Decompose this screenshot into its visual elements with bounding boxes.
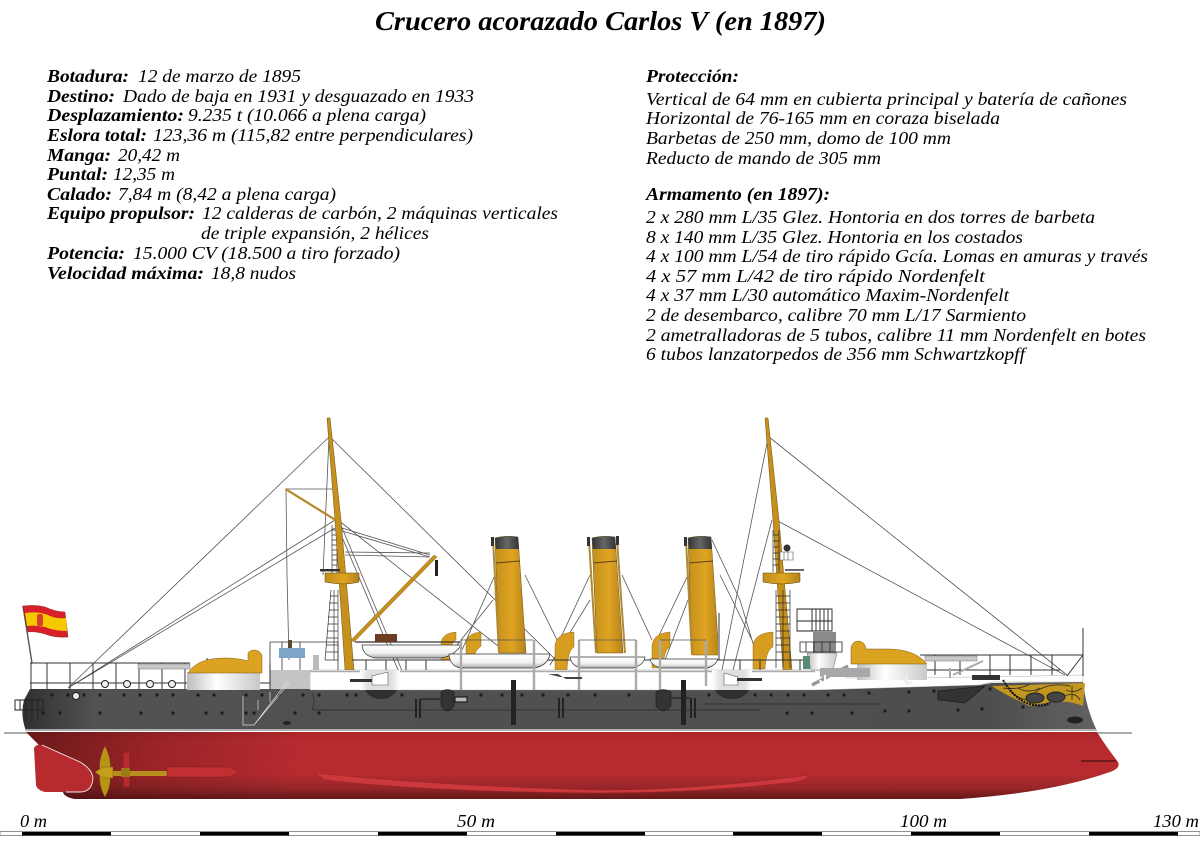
aft barbette	[138, 650, 262, 690]
text block: general specifications	[46, 66, 558, 283]
blades	[100, 746, 110, 797]
text block: general specifications: Desplazamiento:	[46, 105, 184, 125]
stern scuttle	[283, 721, 291, 725]
text block: general specifications: 18,8 nudos	[211, 263, 296, 283]
text block: general specifications: 12,35 m	[113, 164, 175, 184]
aft bridge	[270, 640, 338, 670]
accommodation ladder	[243, 682, 290, 725]
searchlight	[784, 544, 790, 552]
sponson cylinder 1	[441, 690, 454, 711]
aft gun barrel	[138, 664, 190, 669]
mast forward	[763, 418, 804, 670]
flag yellow stripe	[25, 612, 67, 631]
net booms	[420, 697, 690, 702]
scale label 130: 130 m	[1153, 811, 1199, 831]
crane hook	[435, 560, 438, 576]
boat 1	[355, 634, 462, 658]
searchlight platform	[780, 552, 793, 560]
text block: general specifications: de triple expansión, 2 hélices	[201, 223, 429, 243]
flag red stripes	[23, 605, 68, 637]
bilge keel	[315, 773, 808, 793]
text block: general specifications: 7,84 m (8,42 a plena carga)	[118, 184, 336, 205]
davits	[461, 640, 706, 690]
forward lattice	[773, 530, 790, 668]
armour line	[312, 693, 880, 710]
text block: protection	[645, 66, 1127, 168]
shaft	[113, 771, 168, 776]
casemate guns	[350, 670, 762, 699]
text block: general specifications: 20,42 m	[118, 145, 180, 165]
text block: general specifications: Velocidad máxima:	[47, 263, 204, 283]
text block: general specifications: Botadura:	[46, 66, 129, 86]
text block: armament: 4 x 100 mm L/54 de tiro rápido Gcía. Lomas en amuras y través	[646, 246, 1148, 266]
bow casemate shield	[938, 686, 985, 703]
crane	[351, 555, 437, 642]
small gun	[548, 674, 582, 679]
text block: general specifications: 9.235 t (10.066 a plena carga)	[188, 105, 426, 126]
aft fighting top	[325, 573, 359, 584]
text block: protection: Horizontal de 76-165 mm en coraza biselada	[645, 108, 1000, 128]
hawse pipe	[1067, 716, 1083, 724]
text block: protection: Vertical de 64 mm en cubierta principal y batería de cañones	[646, 89, 1127, 109]
bow keel mark	[1081, 760, 1116, 762]
ship side profile	[4, 418, 1132, 799]
rigging	[68, 437, 1067, 688]
text block: armament: 4 x 37 mm L/30 automático Maxim-Nordenfelt	[646, 285, 1010, 305]
rudder	[34, 745, 93, 792]
casemate aft	[350, 670, 400, 699]
title: Crucero acorazado Carlos V (en 1897)	[375, 6, 826, 36]
text block: general specifications: Manga:	[46, 145, 111, 165]
forward dome	[851, 641, 927, 664]
forward davit crane	[950, 661, 983, 678]
capstan and windlass	[972, 675, 1000, 680]
superstructure white	[270, 670, 1083, 690]
forward top gun	[785, 569, 804, 571]
text block: general specifications: Dado de baja en 1931 y desguazado en 1933	[122, 86, 474, 106]
text block: general specifications: 123,36 m (115,82 entre perpendiculares)	[153, 125, 473, 146]
text block: general specifications: 12 calderas de carbón, 2 máquinas verticales	[202, 203, 558, 223]
text block: armament	[645, 184, 1148, 364]
forward barbette	[851, 641, 977, 680]
hull fittings	[15, 680, 1083, 725]
mast aft	[285, 418, 438, 670]
text block: protection: Protección:	[645, 66, 739, 86]
hull grey topsides	[22, 682, 1097, 731]
text block: general specifications: 15.000 CV (18.500 a tiro forzado)	[133, 243, 400, 264]
text block: general specifications: Eslora total:	[46, 125, 147, 145]
boat 2	[449, 654, 550, 668]
text block: armament: 2 de desembarco, calibre 70 mm L/17 Sarmiento	[646, 305, 1026, 325]
ventilator cowls	[441, 632, 773, 670]
text block: armament: 2 x 280 mm L/35 Glez. Hontoria en dos torres de barbeta	[646, 207, 1095, 227]
white anchor forward	[903, 674, 912, 685]
forward fighting top	[763, 573, 800, 584]
aft deck life rings	[72, 680, 176, 700]
flag shield	[37, 614, 43, 626]
text block: protection: Reducto de mando de 305 mm	[645, 148, 881, 168]
bow ornament	[992, 680, 1085, 706]
hull red underbody	[26, 732, 1119, 799]
stern tube	[167, 767, 238, 777]
portholes	[41, 687, 1025, 715]
aft mast pole	[327, 418, 354, 670]
anchors	[1026, 693, 1044, 703]
scale bar	[0, 811, 1200, 836]
rails	[30, 628, 1083, 689]
text block: armament: 2 ametralladoras de 5 tubos, calibre 11 mm Nordenfelt en botes	[646, 325, 1146, 345]
forward bridge	[797, 609, 870, 685]
forward deck fittings	[820, 661, 1000, 688]
aft lattice	[325, 525, 338, 660]
text block: general specifications: Destino:	[46, 86, 115, 106]
stern gallery	[15, 700, 43, 722]
scale label 100: 100 m	[900, 811, 947, 831]
boat 3	[570, 657, 645, 668]
forward mast pole	[765, 418, 792, 670]
boat 4	[650, 659, 718, 668]
scale label 50: 50 m	[457, 811, 495, 831]
funnel 2	[587, 536, 625, 653]
boot-topping line	[26, 729, 1097, 731]
scale label 0: 0 m	[20, 811, 47, 831]
funnels	[491, 536, 719, 660]
text block: armament: 8 x 140 mm L/35 Glez. Hontoria en los costados	[646, 227, 1023, 247]
anchor chain	[1003, 680, 1050, 706]
white anchor aft	[820, 675, 832, 688]
shaft bracket	[123, 752, 130, 787]
propeller and shaft	[95, 746, 238, 797]
bearing	[121, 768, 130, 777]
text block: protection: Barbetas de 250 mm, domo de 100 mm	[646, 128, 951, 148]
text block: general specifications: Potencia:	[46, 243, 125, 263]
funnel 3	[684, 536, 719, 660]
boat falls	[461, 639, 706, 641]
text block: armament: Armamento (en 1897):	[645, 184, 830, 205]
waterline markers	[4, 732, 1132, 734]
boats	[355, 634, 718, 690]
text block: general specifications: 12 de marzo de 1895	[138, 66, 301, 86]
aft top gun	[320, 569, 340, 571]
aft gaff	[285, 488, 336, 521]
funnel 1	[491, 536, 526, 653]
vertical bars	[415, 680, 696, 725]
text block: general specifications: Calado:	[47, 184, 112, 204]
text block: armament: 4 x 57 mm L/42 de tiro rápido Nordenfelt	[646, 266, 986, 286]
flag	[23, 605, 68, 663]
casemate mid	[712, 670, 762, 699]
text block: general specifications: Puntal:	[46, 164, 108, 184]
hub	[95, 767, 113, 778]
sponson cylinder 2	[656, 690, 671, 711]
text block: armament: 6 tubos lanzatorpedos de 356 mm Schwartzkopff	[646, 344, 1028, 364]
text block: general specifications: Equipo propulsor:	[46, 203, 195, 223]
aft dome	[188, 650, 262, 673]
forward gun barrel	[925, 656, 977, 661]
flagstaff	[23, 606, 32, 663]
